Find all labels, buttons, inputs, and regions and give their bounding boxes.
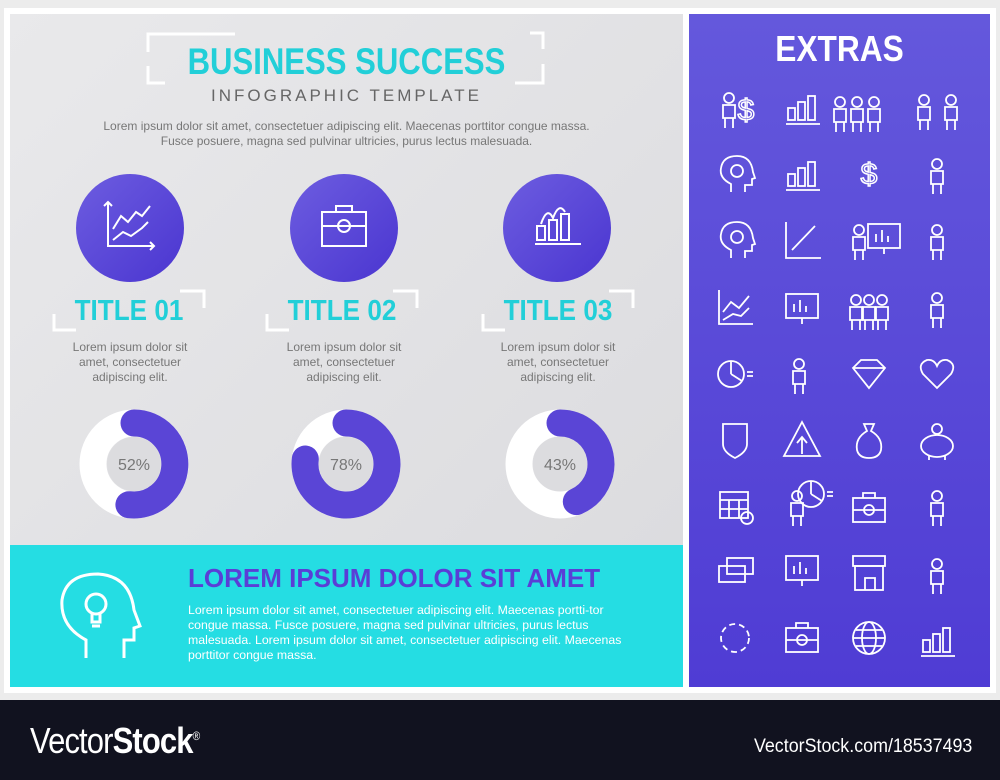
title 02: TITLE 02: [288, 295, 396, 327]
icons row 1: [723, 93, 957, 132]
intro text: Lorem ipsum dolor sit amet, consectetuer adipiscing elit. Maecenas porttitor congue massa.: [103, 119, 590, 133]
text 01: Lorem ipsum dolor sit: [73, 340, 187, 354]
icon circle 3: bar growth: [503, 174, 611, 282]
donut charts: [80, 410, 614, 518]
title 03: TITLE 03: [504, 295, 612, 327]
logo: VectorStock®: [30, 720, 199, 761]
text 01: amet, consectetuer: [79, 355, 181, 369]
icon circle 2: briefcase: [290, 174, 398, 282]
heading: lorem ipsum: LOREM IPSUM DOLOR SIT AMET: [188, 563, 600, 593]
text 02: adipiscing elit.: [306, 370, 382, 384]
icons row 7: [720, 481, 943, 526]
title brackets: [146, 32, 544, 84]
title 03: [482, 290, 634, 332]
heading: business success: BUSINESS SUCCESS: [188, 41, 505, 82]
text 01: adipiscing elit.: [92, 370, 168, 384]
text 03: adipiscing elit.: [520, 370, 596, 384]
subtitle: INFOGRAPHIC TEMPLATE: [211, 86, 482, 105]
heading: extras: EXTRAS: [775, 28, 904, 69]
intro text: [103, 119, 590, 148]
icons row 5: [718, 359, 953, 394]
title 01: TITLE 01: [75, 295, 183, 327]
icons row 3: [721, 222, 943, 260]
footer: [0, 700, 1000, 780]
icon: head with bulb: [60, 572, 142, 658]
panel: cyan bottom: [10, 545, 683, 687]
icon circle 1: chart: [76, 174, 184, 282]
title 01: [52, 290, 206, 332]
text 03: amet, consectetuer: [507, 355, 609, 369]
donut 78%: [305, 423, 387, 505]
donut 78%: 78%: [330, 457, 362, 474]
text 03: [501, 340, 616, 384]
text 01: [73, 340, 188, 384]
text 02: Lorem ipsum dolor sit: [287, 340, 401, 354]
intro text: Fusce posuere, magna sed pulvinar ultricies, purus lectus malesuada.: [161, 134, 532, 148]
icons row 6: [723, 422, 953, 460]
icons row 9: [721, 622, 955, 656]
donut 52%: 52%: [118, 457, 150, 474]
panel: extras: [689, 14, 990, 687]
icons row 8: [719, 556, 943, 594]
url: VectorStock.com/18537493: [754, 736, 972, 757]
icons row 4: [719, 290, 943, 330]
donut 43%: 43%: [544, 457, 576, 474]
donut 43%: [519, 423, 601, 505]
panel: main grey: [10, 14, 683, 545]
donut 52%: [93, 423, 175, 505]
body text: Lorem ipsum dolor sit amet, consectetuer adipiscing elit. Maecenas portti-tor congue massa. Fusce posuere, magna sed pulvinar ultricies, purus lectus malesuada. Lorem ipsum dolor sit amet, consectetuer adipiscing elit. Maecenas porttitor congue massa.: [188, 603, 621, 662]
icons row 2: [721, 156, 943, 194]
text 02: amet, consectetuer: [293, 355, 395, 369]
text 03: Lorem ipsum dolor sit: [501, 340, 615, 354]
text 02: [287, 340, 402, 384]
title 02: [266, 290, 418, 332]
icon grid: [717, 92, 958, 657]
